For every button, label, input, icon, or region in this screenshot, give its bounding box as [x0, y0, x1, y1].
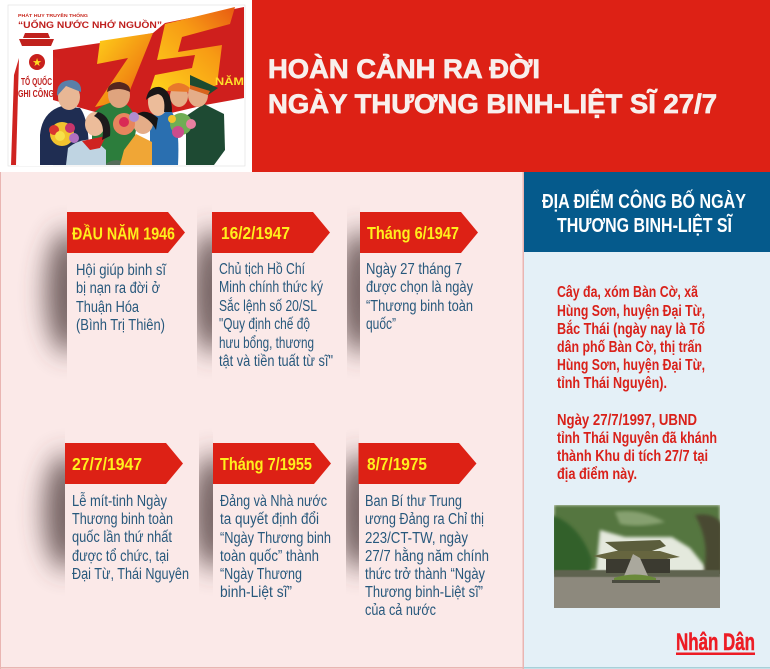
- poster number 7: [95, 33, 153, 107]
- date arrow: [360, 212, 478, 253]
- description: thức trở thành “Ngày: [365, 566, 485, 583]
- location description: [557, 284, 717, 483]
- location panel bottom edge: [524, 667, 770, 668]
- description: Thương binh toàn: [72, 511, 173, 528]
- description: được tổ chức, tại: [72, 548, 169, 565]
- panel: location: [524, 172, 770, 669]
- poster flag: [53, 7, 244, 118]
- location description: Cây đa, xóm Bàn Cờ, xã: [557, 284, 698, 301]
- description: Đảng và Nhà nước: [220, 493, 327, 510]
- timeline item: 8/7/1975: [358, 443, 489, 619]
- description: ta quyết định đổi: [220, 511, 319, 528]
- title: NGÀY THƯƠNG BINH-LIỆT SĨ 27/7: [268, 89, 717, 119]
- description: quốc lần thứ nhất: [72, 529, 173, 546]
- description: Hội giúp binh sĩ: [76, 262, 167, 279]
- description: toàn quốc” thành: [220, 548, 319, 565]
- poster: Uống nước nhớ nguồn 75 năm: [0, 0, 252, 172]
- location panel body: [524, 252, 770, 669]
- description: [220, 493, 331, 601]
- date arrow: [213, 443, 331, 484]
- description: 27/7 hằng năm chính: [365, 548, 489, 565]
- description: [365, 493, 489, 619]
- description: được chọn là ngày: [366, 279, 473, 296]
- description: Ban Bí thư Trung: [365, 493, 462, 510]
- panel: timeline background: [0, 172, 524, 669]
- poster people: [40, 75, 225, 165]
- description: của cả nước: [365, 602, 436, 619]
- description: "Quy định chế độ: [219, 316, 310, 333]
- timeline item: Đầu năm 1946: [67, 212, 185, 334]
- header band: [0, 0, 770, 172]
- poster slogan: PHÁT HUY TRUYỀN THỐNG: [18, 12, 89, 18]
- poster monument: ★: [32, 57, 42, 69]
- poster slogan: [18, 12, 162, 30]
- description: 223/CT-TW, ngày: [365, 530, 468, 547]
- date arrow: [358, 443, 476, 484]
- timeline item: Tháng 6/1947: [360, 212, 478, 333]
- description: Lễ mít-tinh Ngày: [72, 493, 167, 510]
- description: binh-Liệt sĩ”: [220, 584, 292, 601]
- date arrow: [212, 212, 330, 253]
- description: “Thương binh toàn: [366, 298, 473, 315]
- date label: 8/7/1975: [367, 454, 427, 474]
- description: Đại Từ, Thái Nguyên: [72, 566, 189, 583]
- location description: thành Khu di tích 27/7 tại: [557, 448, 708, 465]
- description: Ngày 27 tháng 7: [366, 261, 462, 278]
- date label: 27/7/1947: [72, 454, 142, 474]
- description: “Ngày Thương binh: [220, 530, 331, 547]
- description: Thuận Hóa: [76, 299, 139, 316]
- date label: ĐẦU NĂM 1946: [72, 222, 175, 244]
- location description: dân phố Bàn Cờ, thị trấn: [557, 339, 702, 356]
- poster flower bouquets: [49, 112, 196, 146]
- poster monument: GHI CÔNG: [18, 87, 54, 100]
- description: Sắc lệnh số 20/SL: [219, 298, 317, 315]
- description: Thương binh-Liệt sĩ”: [365, 584, 483, 601]
- timeline item: 16/2/1947: [212, 212, 333, 370]
- photo: memorial site: [552, 505, 722, 608]
- timeline item: Tháng 7/1955: [213, 443, 331, 601]
- description: hưu bổng, thương: [219, 335, 314, 352]
- date label: Tháng 6/1947: [367, 223, 459, 243]
- description: ương Đảng ra Chỉ thị: [365, 511, 484, 528]
- location description: Hùng Sơn, huyện Đại Từ,: [557, 303, 705, 320]
- timeline item: 27/7/1947: [65, 443, 189, 583]
- poster năm label: NĂM: [215, 75, 244, 88]
- description: [219, 261, 333, 370]
- location description: Bắc Thái (ngày nay là Tổ: [557, 320, 705, 338]
- date arrow: [67, 212, 185, 253]
- date arrow: [65, 443, 183, 484]
- poster number 5: [150, 7, 235, 92]
- poster monument: TỔ QUỐC: [21, 74, 52, 88]
- description: [72, 493, 189, 583]
- poster slogan: “UỐNG NƯỚC NHỚ NGUỒN”: [18, 19, 162, 30]
- title: [268, 54, 717, 119]
- description: Minh chính thức ký: [219, 279, 323, 296]
- column shadows: [44, 172, 522, 667]
- date label: Tháng 7/1955: [220, 454, 312, 474]
- date label: 16/2/1947: [221, 223, 290, 243]
- location description: Hùng Sơn, huyện Đại Từ,: [557, 357, 705, 374]
- description: [366, 261, 473, 333]
- title: HOÀN CẢNH RA ĐỜI: [268, 54, 540, 84]
- location description: tỉnh Thái Nguyên).: [557, 375, 667, 392]
- description: tật và tiền tuất từ sĩ": [219, 353, 333, 370]
- location description: địa điểm này.: [557, 466, 637, 483]
- description: quốc”: [366, 316, 396, 333]
- description: Chủ tịch Hồ Chí: [219, 261, 306, 278]
- description: bị nạn ra đời ở: [76, 280, 160, 297]
- location description: Ngày 27/7/1997, UBND: [557, 412, 697, 429]
- location description: tỉnh Thái Nguyên đã khánh: [557, 430, 717, 447]
- description: “Ngày Thương: [220, 566, 302, 583]
- description: [76, 262, 167, 334]
- location panel heading: THƯƠNG BINH-LIỆT SĨ: [557, 213, 733, 237]
- location panel heading: [524, 172, 770, 252]
- description: (Bình Trị Thiên): [76, 317, 165, 334]
- poster monument: [11, 33, 60, 166]
